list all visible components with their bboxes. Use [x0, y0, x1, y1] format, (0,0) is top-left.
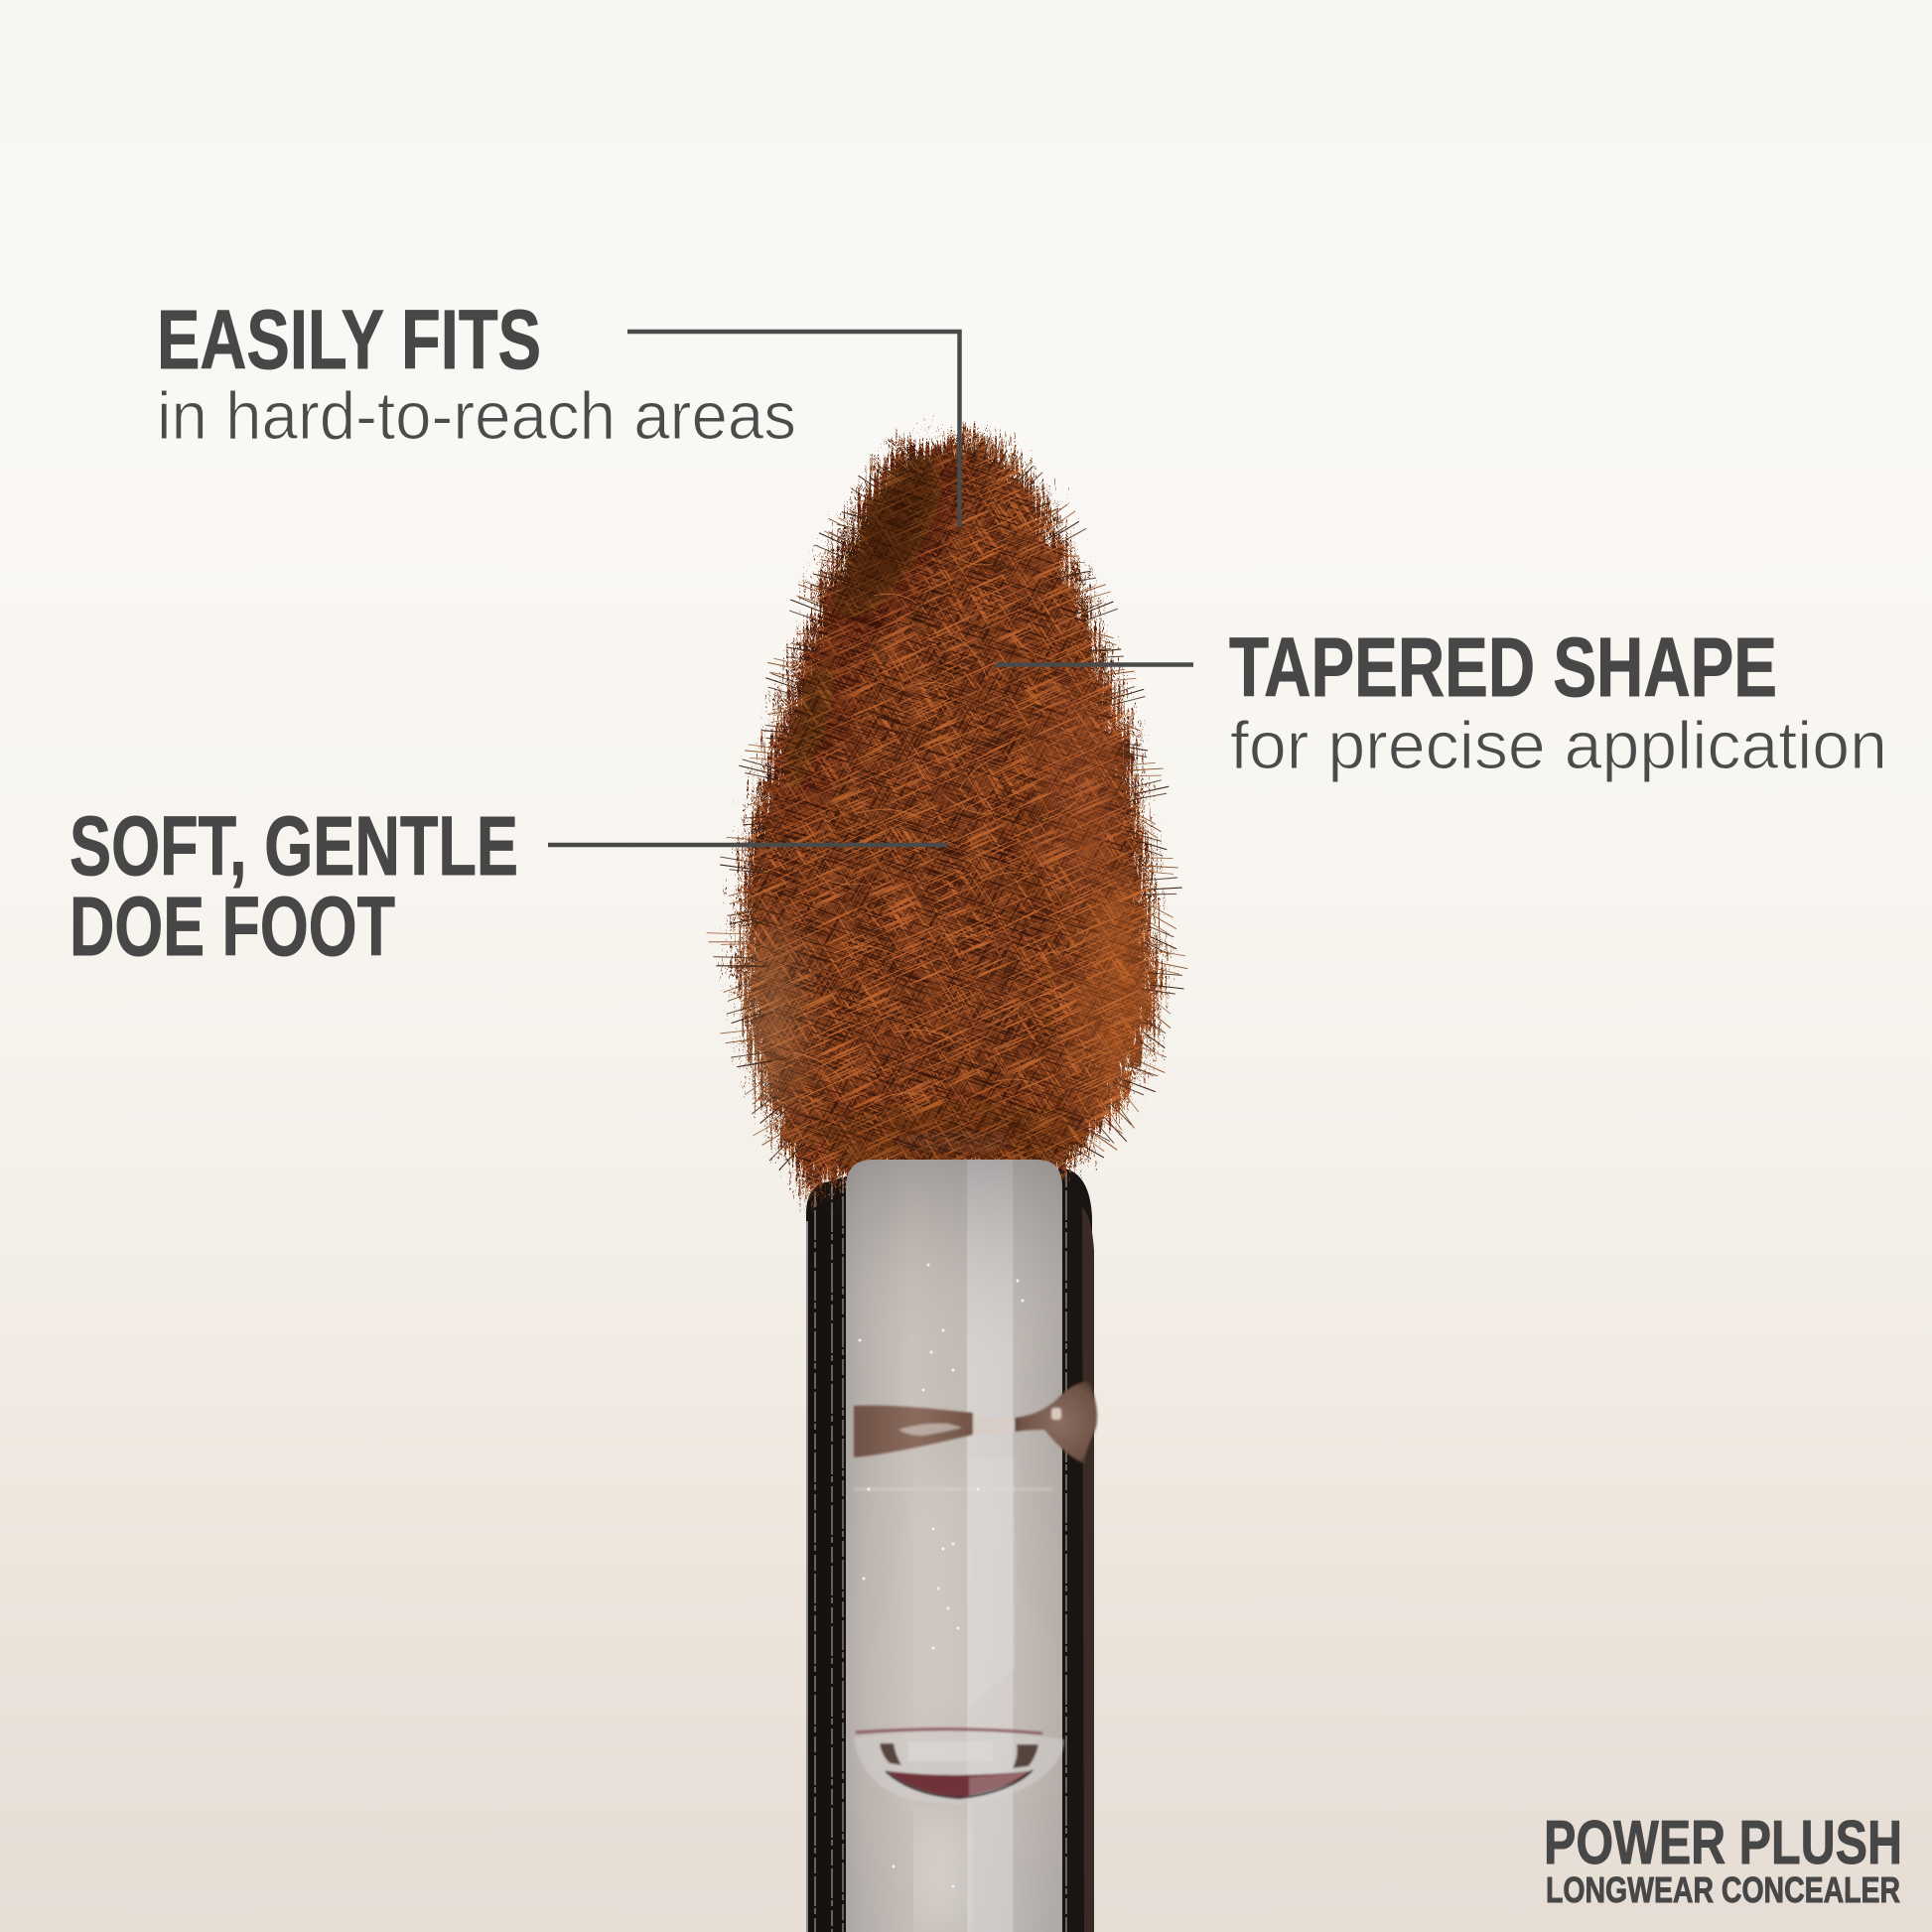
leader line — [627, 332, 959, 527]
doe-foot tip — [718, 415, 1179, 1216]
tube speckles — [858, 1263, 1025, 1888]
subtext: for precise application — [1230, 708, 1887, 783]
clear tube section — [846, 1160, 1097, 1932]
callout: tapered shape — [996, 621, 1887, 783]
stray hairs — [700, 431, 1196, 1178]
subtext: in hard-to-reach areas — [157, 378, 796, 454]
product name — [1544, 1809, 1902, 1910]
heading: SOFT, GENTLE — [69, 799, 518, 893]
applicator tube dark walls — [806, 1168, 1094, 1932]
leader line — [996, 662, 1193, 667]
heading: TAPERED SHAPE — [1229, 621, 1777, 714]
leader line — [548, 843, 948, 847]
heading: DOE FOOT — [69, 880, 395, 973]
heading: EASILY FITS — [157, 293, 541, 386]
callout: easily fits — [157, 293, 959, 527]
product: brush applicator — [707, 415, 1187, 1932]
callout: soft gentle doe foot — [69, 799, 948, 973]
liquid band — [854, 1382, 1097, 1463]
lower lens cavity — [854, 1729, 1064, 1805]
fur shading — [746, 433, 1153, 1160]
interior highlight strands — [794, 556, 1112, 1102]
